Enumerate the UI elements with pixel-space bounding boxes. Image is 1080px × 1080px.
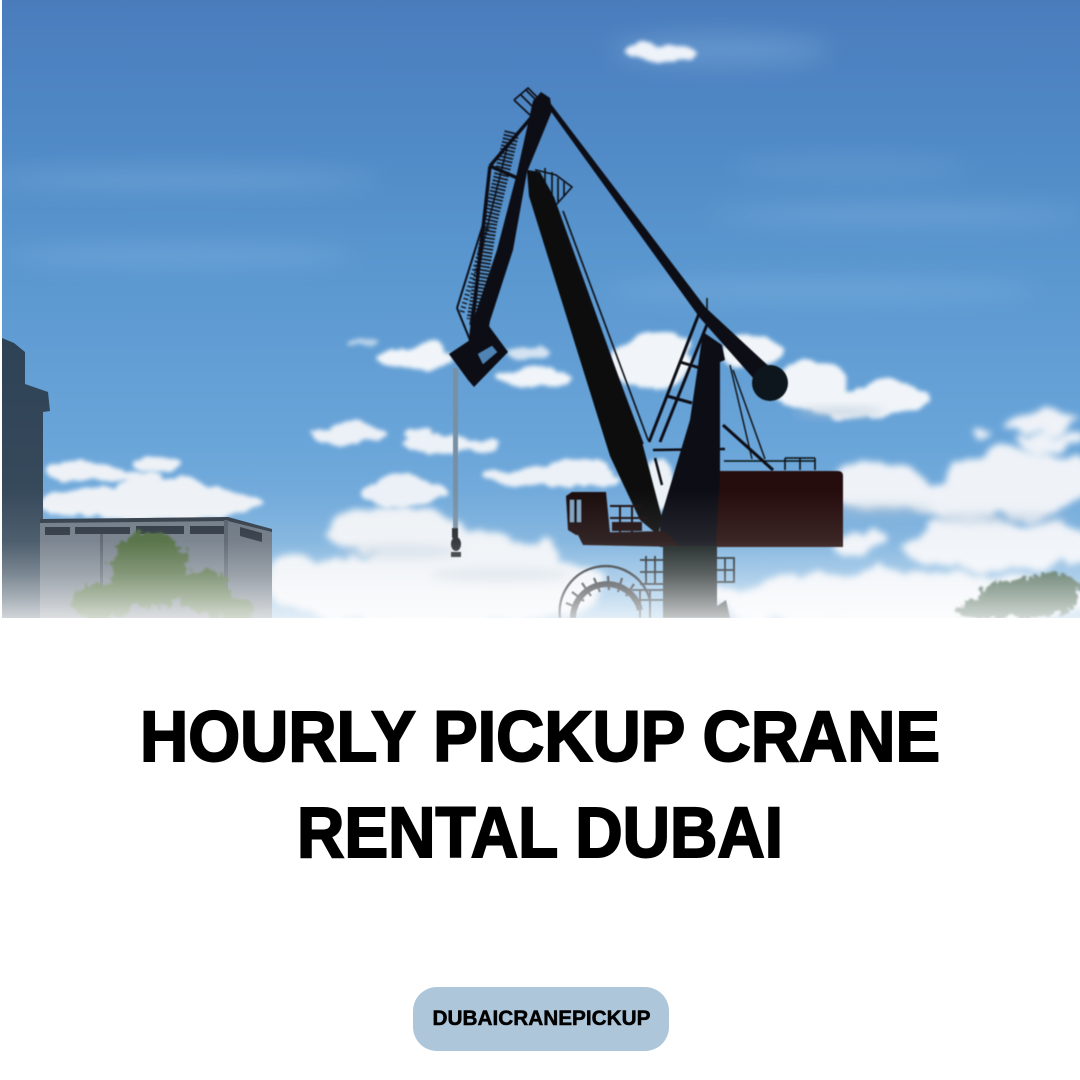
title — [140, 698, 940, 873]
clouds behind buildings — [38, 456, 262, 521]
crane tower — [660, 332, 725, 547]
high thin cloud streaks — [0, 34, 1080, 300]
brand pill — [413, 987, 669, 1051]
operator cab — [566, 492, 610, 535]
white fade at photo bottom — [2, 508, 1080, 618]
warehouse building — [40, 517, 272, 618]
cab deck and railing — [577, 506, 680, 547]
hero photo: crane against blue sky — [0, 0, 1080, 628]
clouds lower centre — [270, 506, 606, 628]
crane pedestal — [663, 546, 717, 618]
tree right — [957, 574, 1080, 620]
title line 1: HOURLY PICKUP CRANE — [140, 698, 940, 777]
boom platform — [536, 168, 572, 205]
pill background — [413, 987, 669, 1051]
hoist rope — [453, 368, 458, 528]
pedestal platforms — [632, 556, 734, 618]
jib truss frame and ladder — [457, 88, 540, 345]
cloud shading lower centre — [360, 544, 562, 582]
clouds behind crane counterweight — [610, 331, 930, 417]
crane counterweight — [752, 365, 788, 401]
jib truss lattice — [470, 132, 512, 325]
clouds behind crane jib — [348, 340, 570, 385]
cable drum wheel — [560, 566, 650, 618]
crane machine house — [700, 471, 843, 547]
crane rear tie rod — [547, 104, 775, 388]
crane main boom — [527, 170, 662, 535]
title line 2: RENTAL DUBAI — [297, 794, 783, 873]
cloud: top small — [624, 42, 696, 62]
rigging cables and stays — [653, 365, 815, 485]
crane silhouette — [449, 88, 843, 618]
cloud shading lower right — [815, 504, 1070, 523]
jib head platform — [449, 322, 508, 387]
A-frame struts — [649, 298, 708, 442]
clouds mid left — [312, 419, 674, 509]
cloud shading right of counterweight — [795, 408, 885, 416]
tree left — [70, 532, 256, 622]
sky background — [2, 0, 1080, 618]
boom side ladder — [557, 211, 648, 444]
crane hook — [451, 528, 461, 557]
crane jib — [472, 92, 552, 338]
brand name: DUBAICRANEPICKUP — [432, 1007, 650, 1030]
tower building left — [2, 338, 50, 618]
clouds lower right — [710, 413, 1080, 628]
